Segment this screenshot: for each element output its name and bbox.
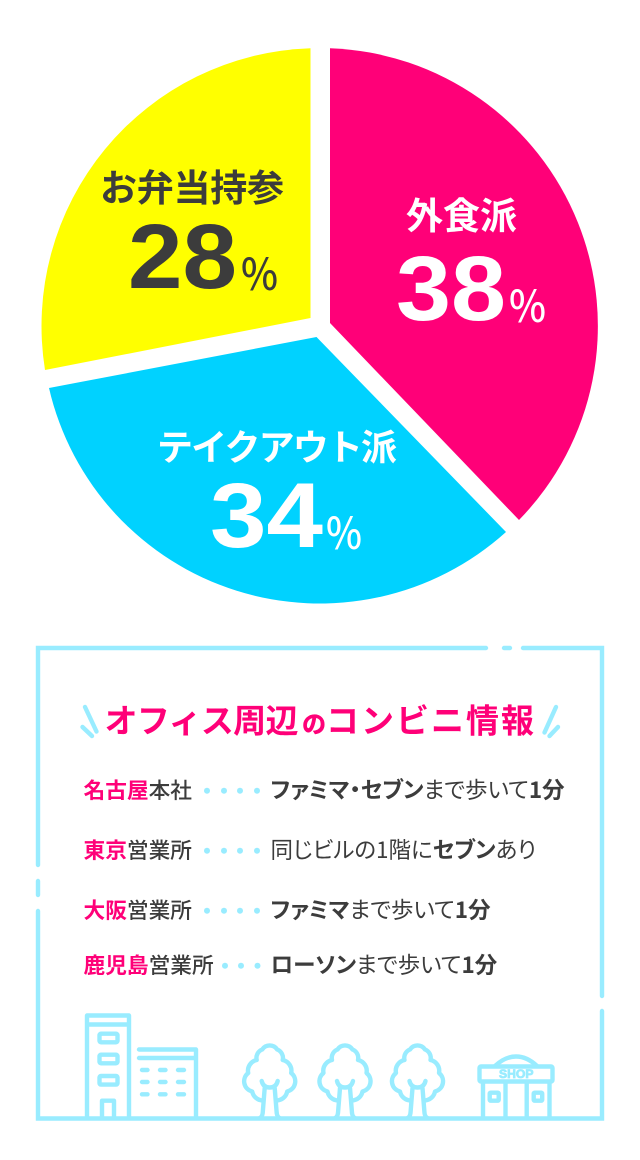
row: 名古屋本社: 名古屋本社 bbox=[84, 774, 192, 805]
segment: テイクアウト派 34%: % bbox=[326, 498, 362, 562]
icon: tree 3 bbox=[392, 1045, 443, 1118]
icon: tree 1 bbox=[244, 1045, 295, 1118]
segment: 外食派 38%: 38 bbox=[396, 238, 506, 340]
icon: right sparkle bbox=[544, 707, 558, 736]
heading text: コンビニ情報 bbox=[326, 694, 534, 742]
segment: お弁当持参 28% bbox=[42, 48, 310, 370]
icon: shop bbox=[480, 1056, 552, 1118]
row: 鹿児島営業所: ローソンまで歩いて1分 bbox=[270, 948, 498, 980]
row: 大阪営業所: ファミマまで歩いて1分 bbox=[270, 893, 491, 925]
heading text: オフィス周辺 bbox=[104, 694, 298, 742]
heading bbox=[82, 694, 558, 742]
segment: お弁当持参 28%: 28 bbox=[128, 206, 237, 308]
row: 名古屋本社: ファミマ・セブンまで歩いて1分 bbox=[270, 773, 565, 805]
segment: テイクアウト派 34%: 34 bbox=[210, 465, 323, 567]
heading text: の bbox=[302, 704, 326, 740]
row: 大阪営業所 bbox=[84, 893, 491, 925]
segment: テイクアウト派 34%: テイクアウト派 bbox=[157, 419, 397, 471]
pie chart bbox=[42, 48, 598, 603]
row: 鹿児島営業所 bbox=[84, 948, 498, 980]
segment: 外食派 38%: % bbox=[509, 271, 546, 335]
row: 東京営業所: 同じビルの1階にセブンあり bbox=[270, 833, 536, 865]
segment: 外食派 38%: 外食派 bbox=[406, 186, 517, 240]
segment: テイクアウト派 34% bbox=[49, 337, 506, 603]
icon: low building bbox=[139, 1050, 196, 1118]
panel: convenience store information bbox=[38, 648, 602, 1118]
icon: left sparkle bbox=[82, 707, 96, 736]
panel frame bbox=[38, 648, 602, 1118]
row: 東京営業所 bbox=[84, 833, 536, 865]
icon: shop: SHOP bbox=[499, 1067, 534, 1081]
icon: tree 2 bbox=[319, 1045, 371, 1118]
row: 名古屋本社 bbox=[84, 773, 565, 805]
row: 鹿児島営業所: 鹿児島営業所 bbox=[84, 949, 214, 980]
row: 東京営業所: 東京営業所 bbox=[84, 834, 192, 865]
row: 大阪営業所: 大阪営業所 bbox=[84, 894, 192, 925]
segment: お弁当持参 28%: % bbox=[241, 239, 278, 303]
icon: tall building bbox=[87, 1016, 129, 1118]
segment: お弁当持参 28%: お弁当持参 bbox=[100, 158, 284, 212]
segment: 外食派 38% bbox=[330, 48, 598, 520]
